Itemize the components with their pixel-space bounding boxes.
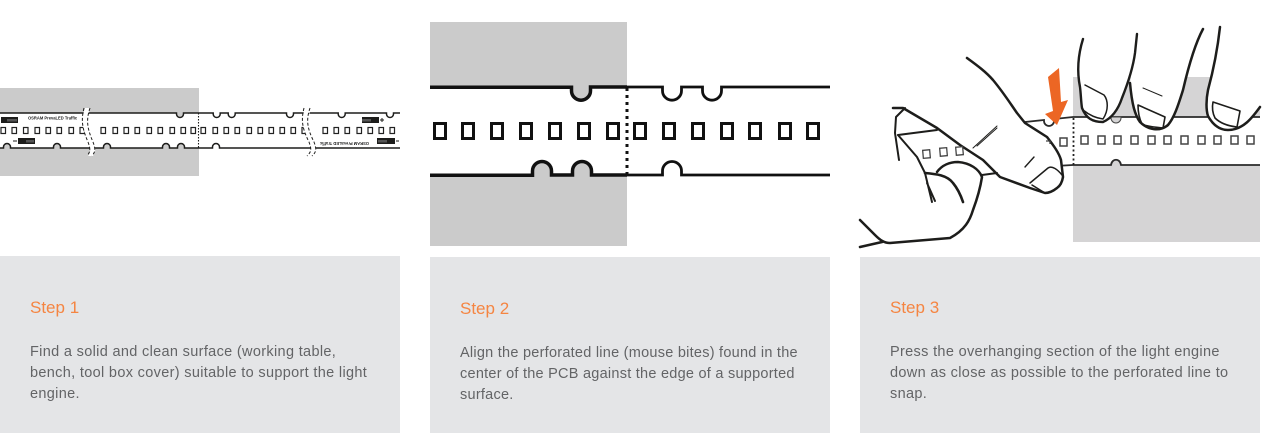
notches inside surface area [532,87,592,175]
notches inside surface area [4,113,184,148]
illustration: step 3 hand snapping strip [858,26,1262,248]
card: step 3 [860,257,1260,433]
text: step 1 description: Find a solid and clean surface (working table, [30,344,336,360]
perforated line [198,113,200,148]
fingers pressing strip [1078,20,1260,130]
text: step 1 description: bench, tool box cover) suitable to support the light [30,364,367,380]
supporting surface [1073,77,1260,242]
strip body [1000,117,1260,175]
strip body [430,87,830,175]
text: step 3 description [890,344,1228,402]
text: step 3 description: snap. [890,386,927,402]
text: step 1 description: engine. [30,386,80,402]
top bump between fingers [1111,117,1121,123]
text: step 2 description [460,344,798,402]
heading: step 3: Step 3 [890,298,939,317]
text: step 3 description: down as close as possible to the perforated line to [890,365,1228,381]
card: step 2 [430,257,830,433]
square contact pads [434,124,818,138]
perforated line [1072,118,1074,165]
heading: step 2: Step 2 [460,299,509,318]
supporting surface [430,22,627,246]
supporting surface [0,88,199,176]
printed label left: OSRAM PrevaLED Traffic [28,116,78,120]
printed label right: OSRAM PrevaLED Traffic [319,141,369,146]
break marks left [82,108,95,156]
components on strip [1,117,399,144]
strip outline [0,113,400,148]
strip outline surface side [430,87,627,175]
text: step 1 description [30,344,367,402]
card: step 1 [0,256,400,433]
contact pads [1,128,394,134]
strip outline [1025,117,1260,166]
hand holding strip [860,58,1063,250]
pads on held strip [923,141,1050,158]
text: step 2 description: Align the perforated line (mouse bites) found in the [460,344,798,360]
strip outline overhanging side [627,87,830,175]
break marks right [302,108,316,156]
illustration: step 1 light engine on surface [0,88,400,176]
perforated line [626,88,628,175]
text: step 2 description: center of the PCB against the edge of a supported [460,366,795,382]
text: step 3 description: Press the overhanging section of the light engine [890,344,1220,360]
text: step 2 description: surface. [460,386,514,402]
heading: step 1: Step 1 [30,298,79,317]
square contact pads [1060,136,1254,146]
arrow: press down [1045,68,1068,125]
strip body [0,113,400,148]
illustration: step 2 alignment close-up [430,22,830,246]
